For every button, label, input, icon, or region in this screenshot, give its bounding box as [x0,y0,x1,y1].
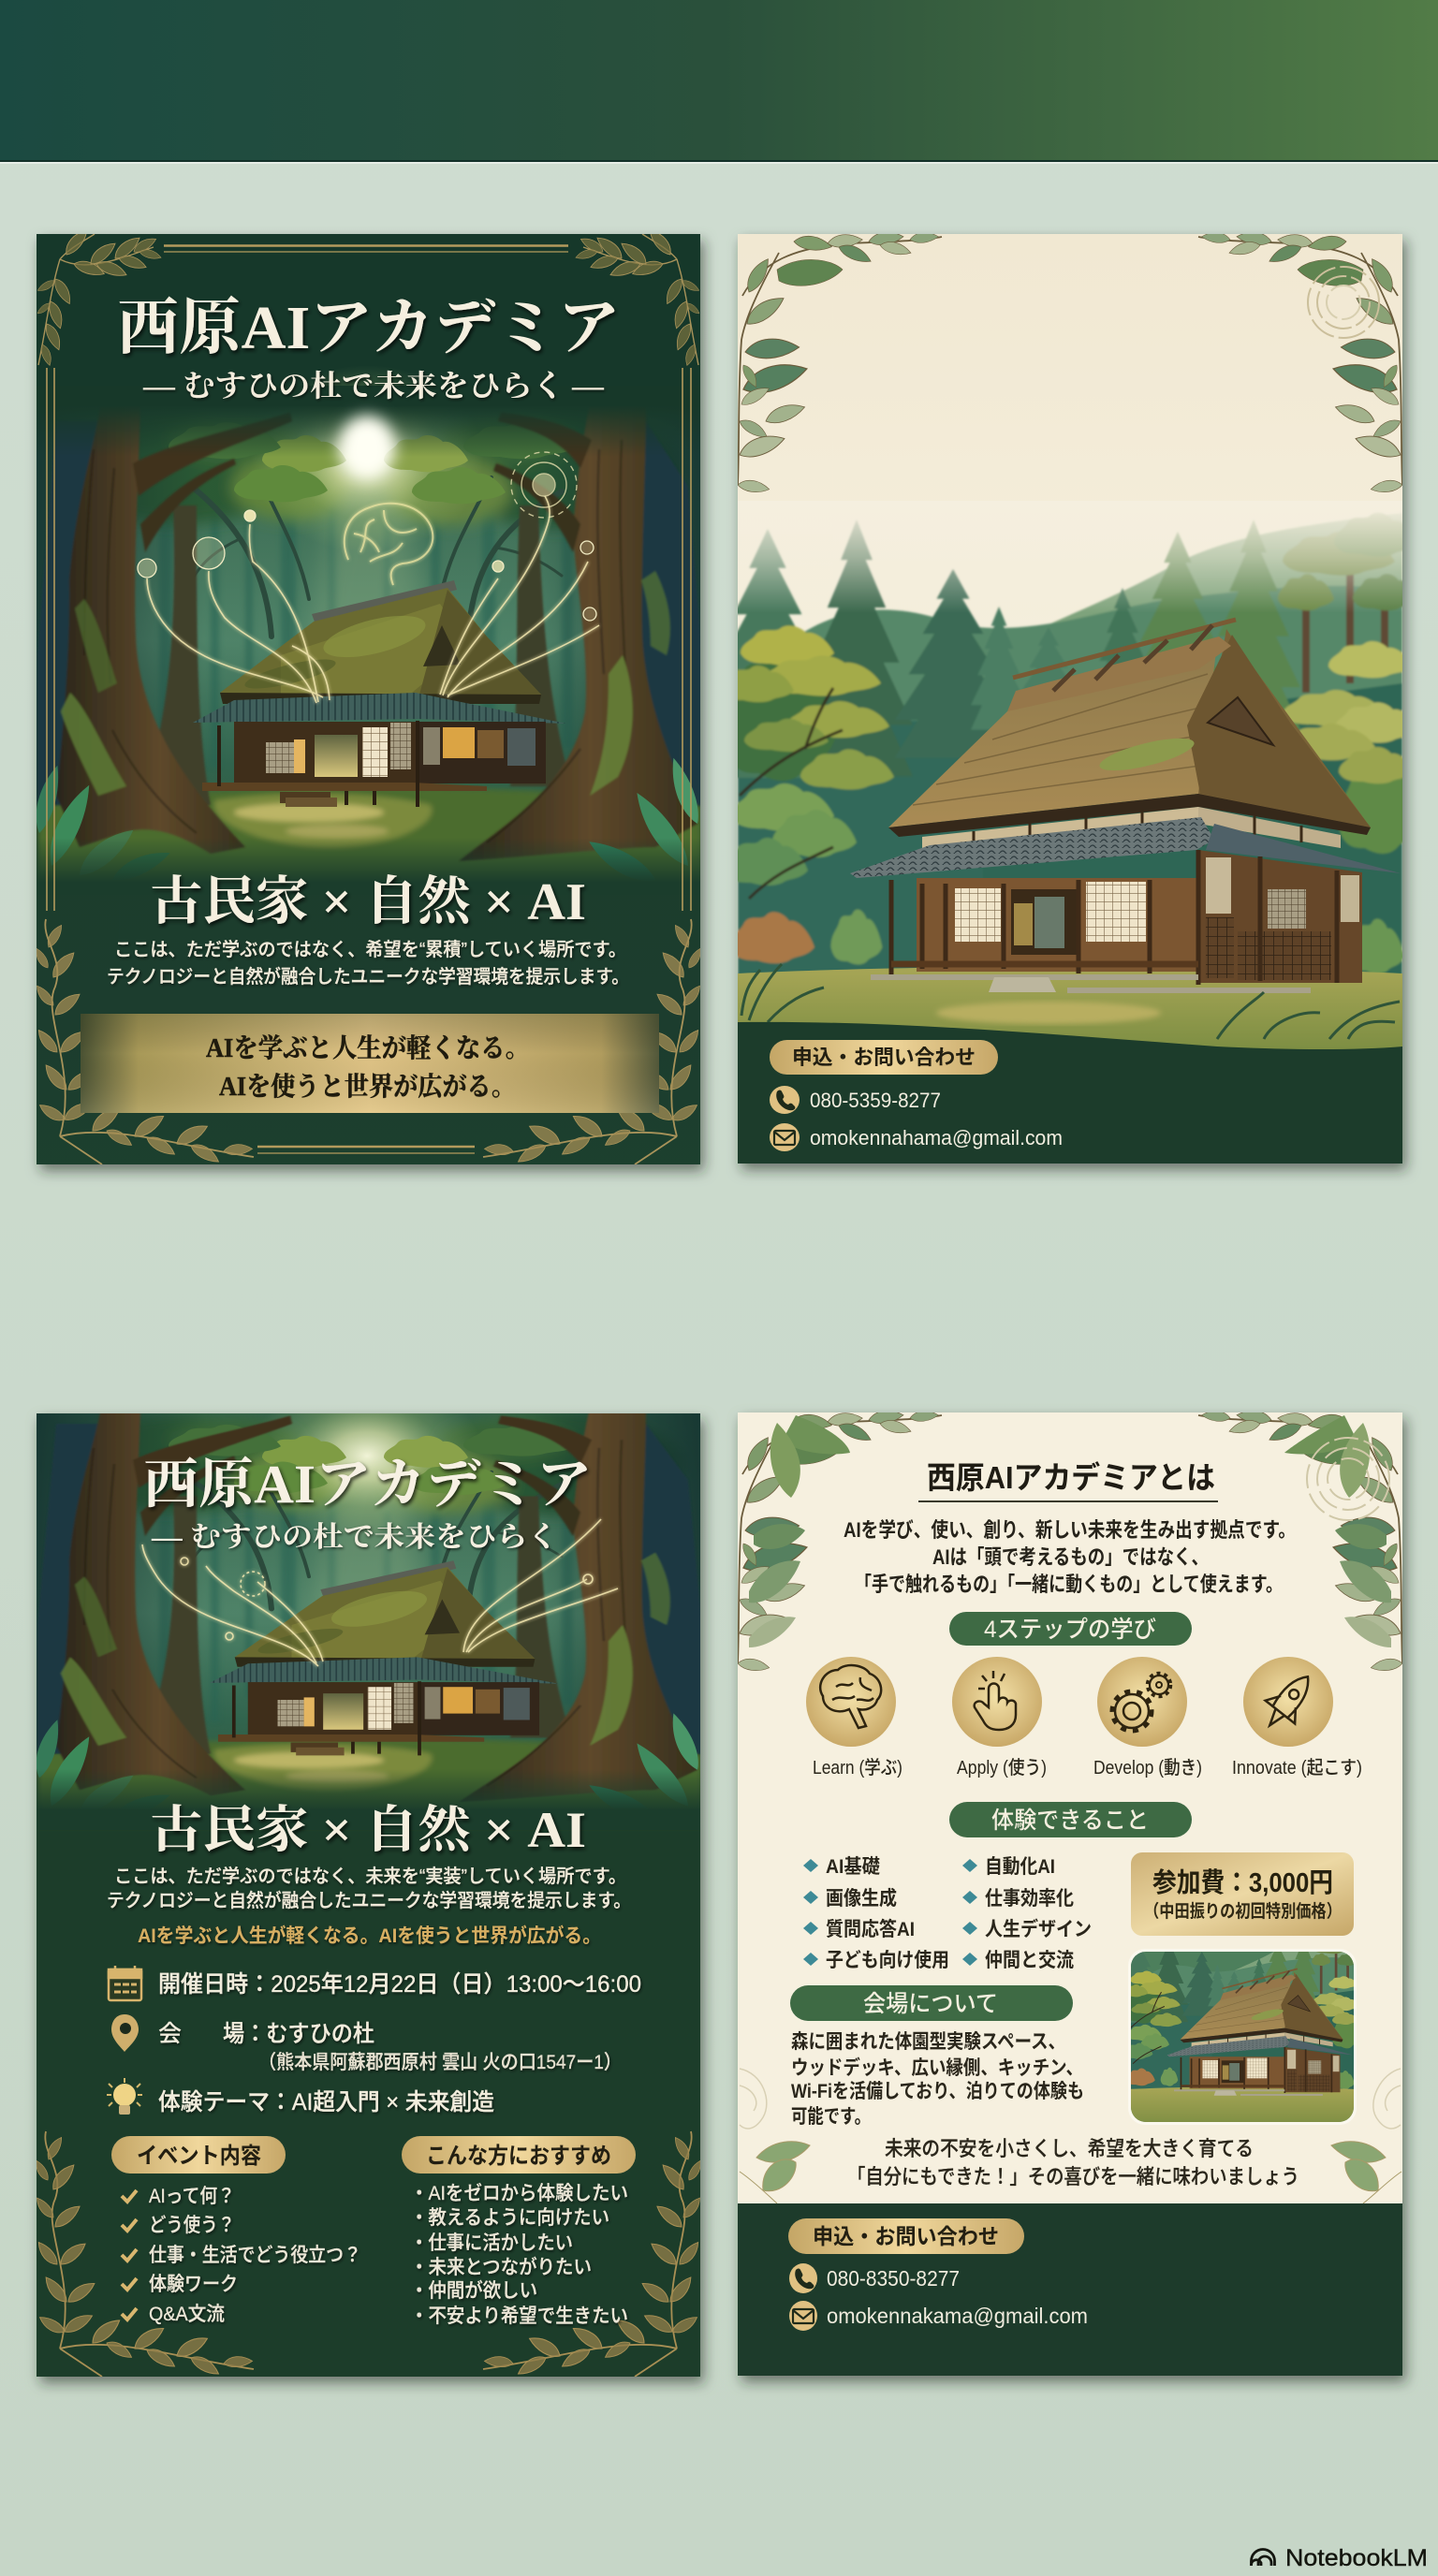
step: innovate: Innovate (起こす) [1232,1757,1362,1778]
description [107,1866,631,1911]
floating glow orbs [138,510,596,621]
large foliage accents [749,1415,1391,1647]
phone row [770,1086,941,1114]
fee box [1131,1852,1354,1936]
section: recommended for: ・仲間が欲しい [410,2280,537,2302]
gold frame lines [47,245,691,1153]
circuit ring icon [511,452,577,518]
fee box: （中田振りの初回特別価格） [1144,1901,1342,1922]
section: event content: 仕事・生活でどう役立つ？ [149,2245,361,2266]
footer wave [738,1022,1402,1164]
footer band [738,2203,1402,2376]
glowing branches [147,496,599,703]
email row [789,2301,1088,2331]
gold message band [81,1014,659,1113]
venue text [791,2031,1084,2128]
subtitle: — むすひの杜で未来をひらく — [142,369,605,402]
gold message band: AIを学ぶと人生が軽くなる。 [206,1033,530,1063]
section: recommended for [402,2136,636,2327]
phone row [789,2263,960,2293]
closing message: 未来の不安を小さくし、希望を大きく育てる [885,2137,1254,2160]
theme row: 体験テーマ：AI超入門 × 未来創造 [158,2089,494,2115]
venue text: 可能です。 [791,2106,871,2128]
heading: 西原AIアカデミアとは [927,1460,1215,1495]
section: event content [111,2136,361,2325]
pill: 4 steps: 4ステップの学び [984,1617,1156,1643]
venue row: 場：むすひの杜 [223,2021,374,2047]
illustration: forest and kominka [37,1413,700,1806]
step: learn: Learn (学ぶ) [813,1757,902,1778]
date row: 開催日時：2025年12月22日（日）13:00～16:00 [158,1971,641,1998]
icon: light bulb [107,2078,142,2115]
email row: omokennahama@gmail.com [810,1126,1063,1149]
intro text: AIは「頭で考えるもの」ではなく、 [932,1545,1209,1569]
illustration: forest and thatched house [738,513,1402,1049]
intro text: AIを学び、使い、創り、新しい未来を生み出す拠点です。 [844,1518,1296,1542]
panel: event details flyer [28,1375,712,2378]
step: innovate [1232,1657,1362,1778]
venue text: Wi-Fiを活備しており、泊りての体験も [791,2081,1084,2102]
description [107,939,629,988]
venue text: 森に囲まれた体園型実験スペース、 [791,2031,1065,2053]
contact pill: 申込・お問い合わせ [792,1046,976,1069]
icon: tapping hand [975,1671,1016,1730]
phone row: 080-5359-8277 [810,1089,941,1112]
lower leaf ornaments [33,2131,704,2378]
description: ここは、ただ学ぶのではなく、未来を“実装”していく場所です。 [114,1866,626,1887]
illustration: forest and glowing kominka [28,365,712,895]
experience list: 自動化AI [985,1856,1055,1878]
pill: 4 steps [949,1612,1192,1646]
glowing branches [142,1519,618,1666]
step: learn [806,1657,902,1778]
section: event content: イベント内容 [137,2144,261,2169]
intro text [844,1518,1296,1596]
title: 西原AIアカデミア [143,1454,592,1515]
section: recommended for: ・仕事に活かしたい [410,2232,573,2254]
title: 西原AIアカデミア [117,294,620,362]
experience list: 子ども向け使用 [826,1950,949,1971]
slogan: kominka x nature x AI: 古民家 × 自然 × AI [150,873,586,931]
contact pill [770,1040,998,1075]
pill: about the venue: 会場について [863,1991,998,2017]
experience list: 質問応答AI [826,1918,915,1940]
section: recommended for: こんな方におすすめ [426,2144,611,2169]
venue text: ウッドデッキ、広い縁側、キッチン、 [791,2056,1083,2079]
gold tagline: AIを学ぶと人生が軽くなる。AIを使うと世界が広がる。 [138,1925,601,1947]
green leaf corners [737,229,1403,494]
gold message band: AIを使うと世界が広がる。 [219,1072,516,1102]
step: apply: Apply (使う) [957,1757,1047,1778]
experience list: AI基礎 [826,1856,880,1878]
closing message: 「自分にもできた！」その喜びを一緒に味わいましょう [847,2165,1299,2188]
experience list: 人生デザイン [985,1918,1092,1940]
venue row [111,2014,622,2073]
section: recommended for: ・不安より希望で生きたい [410,2305,628,2327]
intro text: 「手で触れるもの」「一緒に動くもの」として使えます。 [855,1573,1283,1596]
pill: about the venue [790,1985,1073,2021]
icon: calendar [109,1966,141,2000]
fee box: 参加費：3,000円 [1152,1867,1333,1898]
experience list [803,1856,1092,1971]
icon: NotebookLM arcs [1251,2549,1275,2566]
step: apply [952,1657,1047,1778]
section: event content: Q&A文流 [149,2304,225,2325]
panel: about academy flyer [737,1408,1403,2376]
icon: gears [1112,1674,1170,1731]
icon: brain [820,1665,881,1728]
slogan: 古民家 × 自然 × AI [150,1802,586,1858]
email row [770,1123,1063,1151]
description: テクノロジーと自然が融合したユニークな学習環境を提示します。 [107,1889,631,1911]
panel: front flyer poster [28,227,712,1166]
venue row: （熊本県阿蘇郡西原村 雲山 火の口1547ー1） [258,2052,622,2073]
lower flower ornaments [740,2069,1401,2203]
brain glow icon [345,504,433,585]
description: ここは、ただ学ぶのではなく、希望を“累積”していく場所です。 [114,939,626,960]
pill: what you can experience [949,1802,1192,1837]
icon: map pin [111,2014,139,2052]
section: event content: どう使う？ [149,2215,235,2236]
contact pill [788,2218,1024,2254]
NotebookLM watermark: NotebookLM [1285,2545,1428,2571]
contact pill: 申込・お問い合わせ [813,2224,999,2248]
theme row [107,2078,494,2115]
faint circuit ring [1308,267,1379,338]
experience list: 仲間と交流 [985,1950,1074,1971]
step: develop: Develop (動き) [1093,1757,1202,1778]
email row: omokennakama@gmail.com [827,2304,1088,2328]
top banner [0,0,1438,164]
venue row: 会 [158,2021,182,2047]
step: develop [1093,1657,1202,1778]
section: recommended for: ・未来とつながりたい [410,2257,592,2278]
closing message [847,2137,1299,2188]
date row [109,1966,641,2000]
panel: back flyer with contact [702,229,1422,1164]
description: テクノロジーと自然が融合したユニークな学習環境を提示します。 [107,965,629,988]
experience list: 仕事効率化 [985,1887,1074,1910]
pill: what you can experience: 体験できること [991,1808,1149,1834]
phone row: 080-8350-8277 [827,2266,960,2291]
corner leaf ornaments [33,227,704,1166]
experience list: 画像生成 [826,1887,897,1910]
icon: rocket [1255,1665,1323,1737]
section: event content: 体験ワーク [149,2274,238,2295]
subtitle: — むすひの杜で未来をひらく [151,1522,558,1553]
section: recommended for: ・教えるように向けたい [410,2207,609,2229]
thumbnail: thatched house [1117,1932,1360,2134]
green leaf corners [737,1408,1403,1673]
section: event content: AIって何？ [149,2186,235,2207]
faint circuit ring [1307,1438,1389,1520]
section: recommended for: ・AIをゼロから体験したい [410,2183,628,2204]
